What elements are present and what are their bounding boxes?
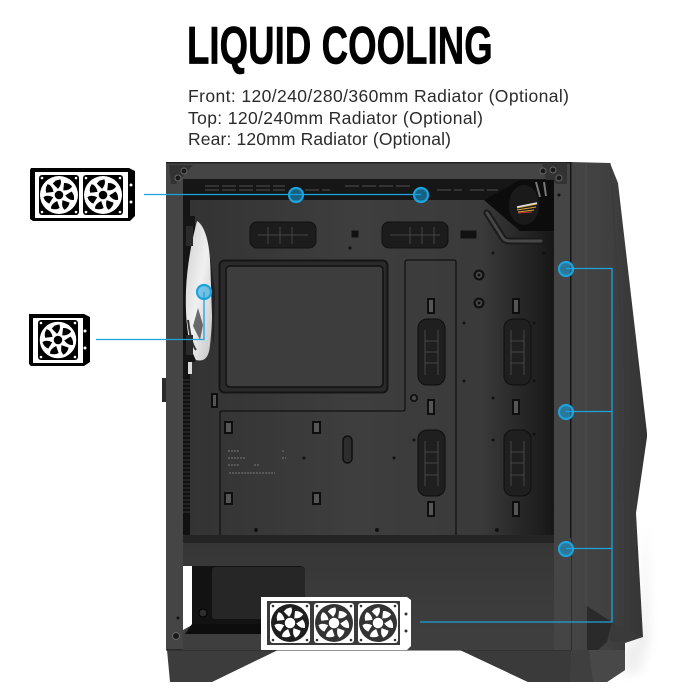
title: LIQUID COOLING (187, 16, 493, 75)
cable routing ridge (487, 213, 541, 241)
rear fan (162, 216, 215, 402)
specifications text: Rear: 120mm Radiator (Optional) (188, 129, 451, 149)
small slots (212, 299, 519, 516)
tray fine print (228, 451, 286, 473)
PC case photo (29, 162, 650, 682)
oval mount (343, 436, 352, 463)
specifications text: Front: 120/240/280/360mm Radiator (Optional) (188, 86, 569, 106)
radiator icon: top 240 mm (30, 168, 135, 221)
specifications text (188, 86, 569, 149)
top vent (183, 179, 554, 200)
callout lines (96, 194, 612, 622)
top grommets (250, 222, 476, 248)
case body frame (166, 162, 571, 650)
front panel facets (587, 606, 612, 650)
radiator icon: rear 120 mm (29, 314, 90, 366)
callout markers (197, 188, 573, 556)
specifications text: Top: 120/240mm Radiator (Optional) (188, 108, 483, 128)
basement shroud (183, 535, 571, 650)
tray panel lines (220, 260, 456, 536)
case soft shadow (622, 520, 650, 676)
interior (183, 179, 554, 539)
motherboard tray (190, 200, 554, 536)
feet (167, 650, 278, 682)
PSU opening (183, 566, 305, 634)
radiator icon: front 360 mm (261, 597, 411, 650)
front panel (460, 162, 647, 682)
left mesh edge (183, 378, 190, 538)
corner screws (169, 164, 567, 644)
cable area (484, 180, 554, 231)
standoffs and screws (176, 194, 560, 620)
motherboard cutout (220, 260, 388, 392)
vertical grommets (418, 319, 531, 496)
